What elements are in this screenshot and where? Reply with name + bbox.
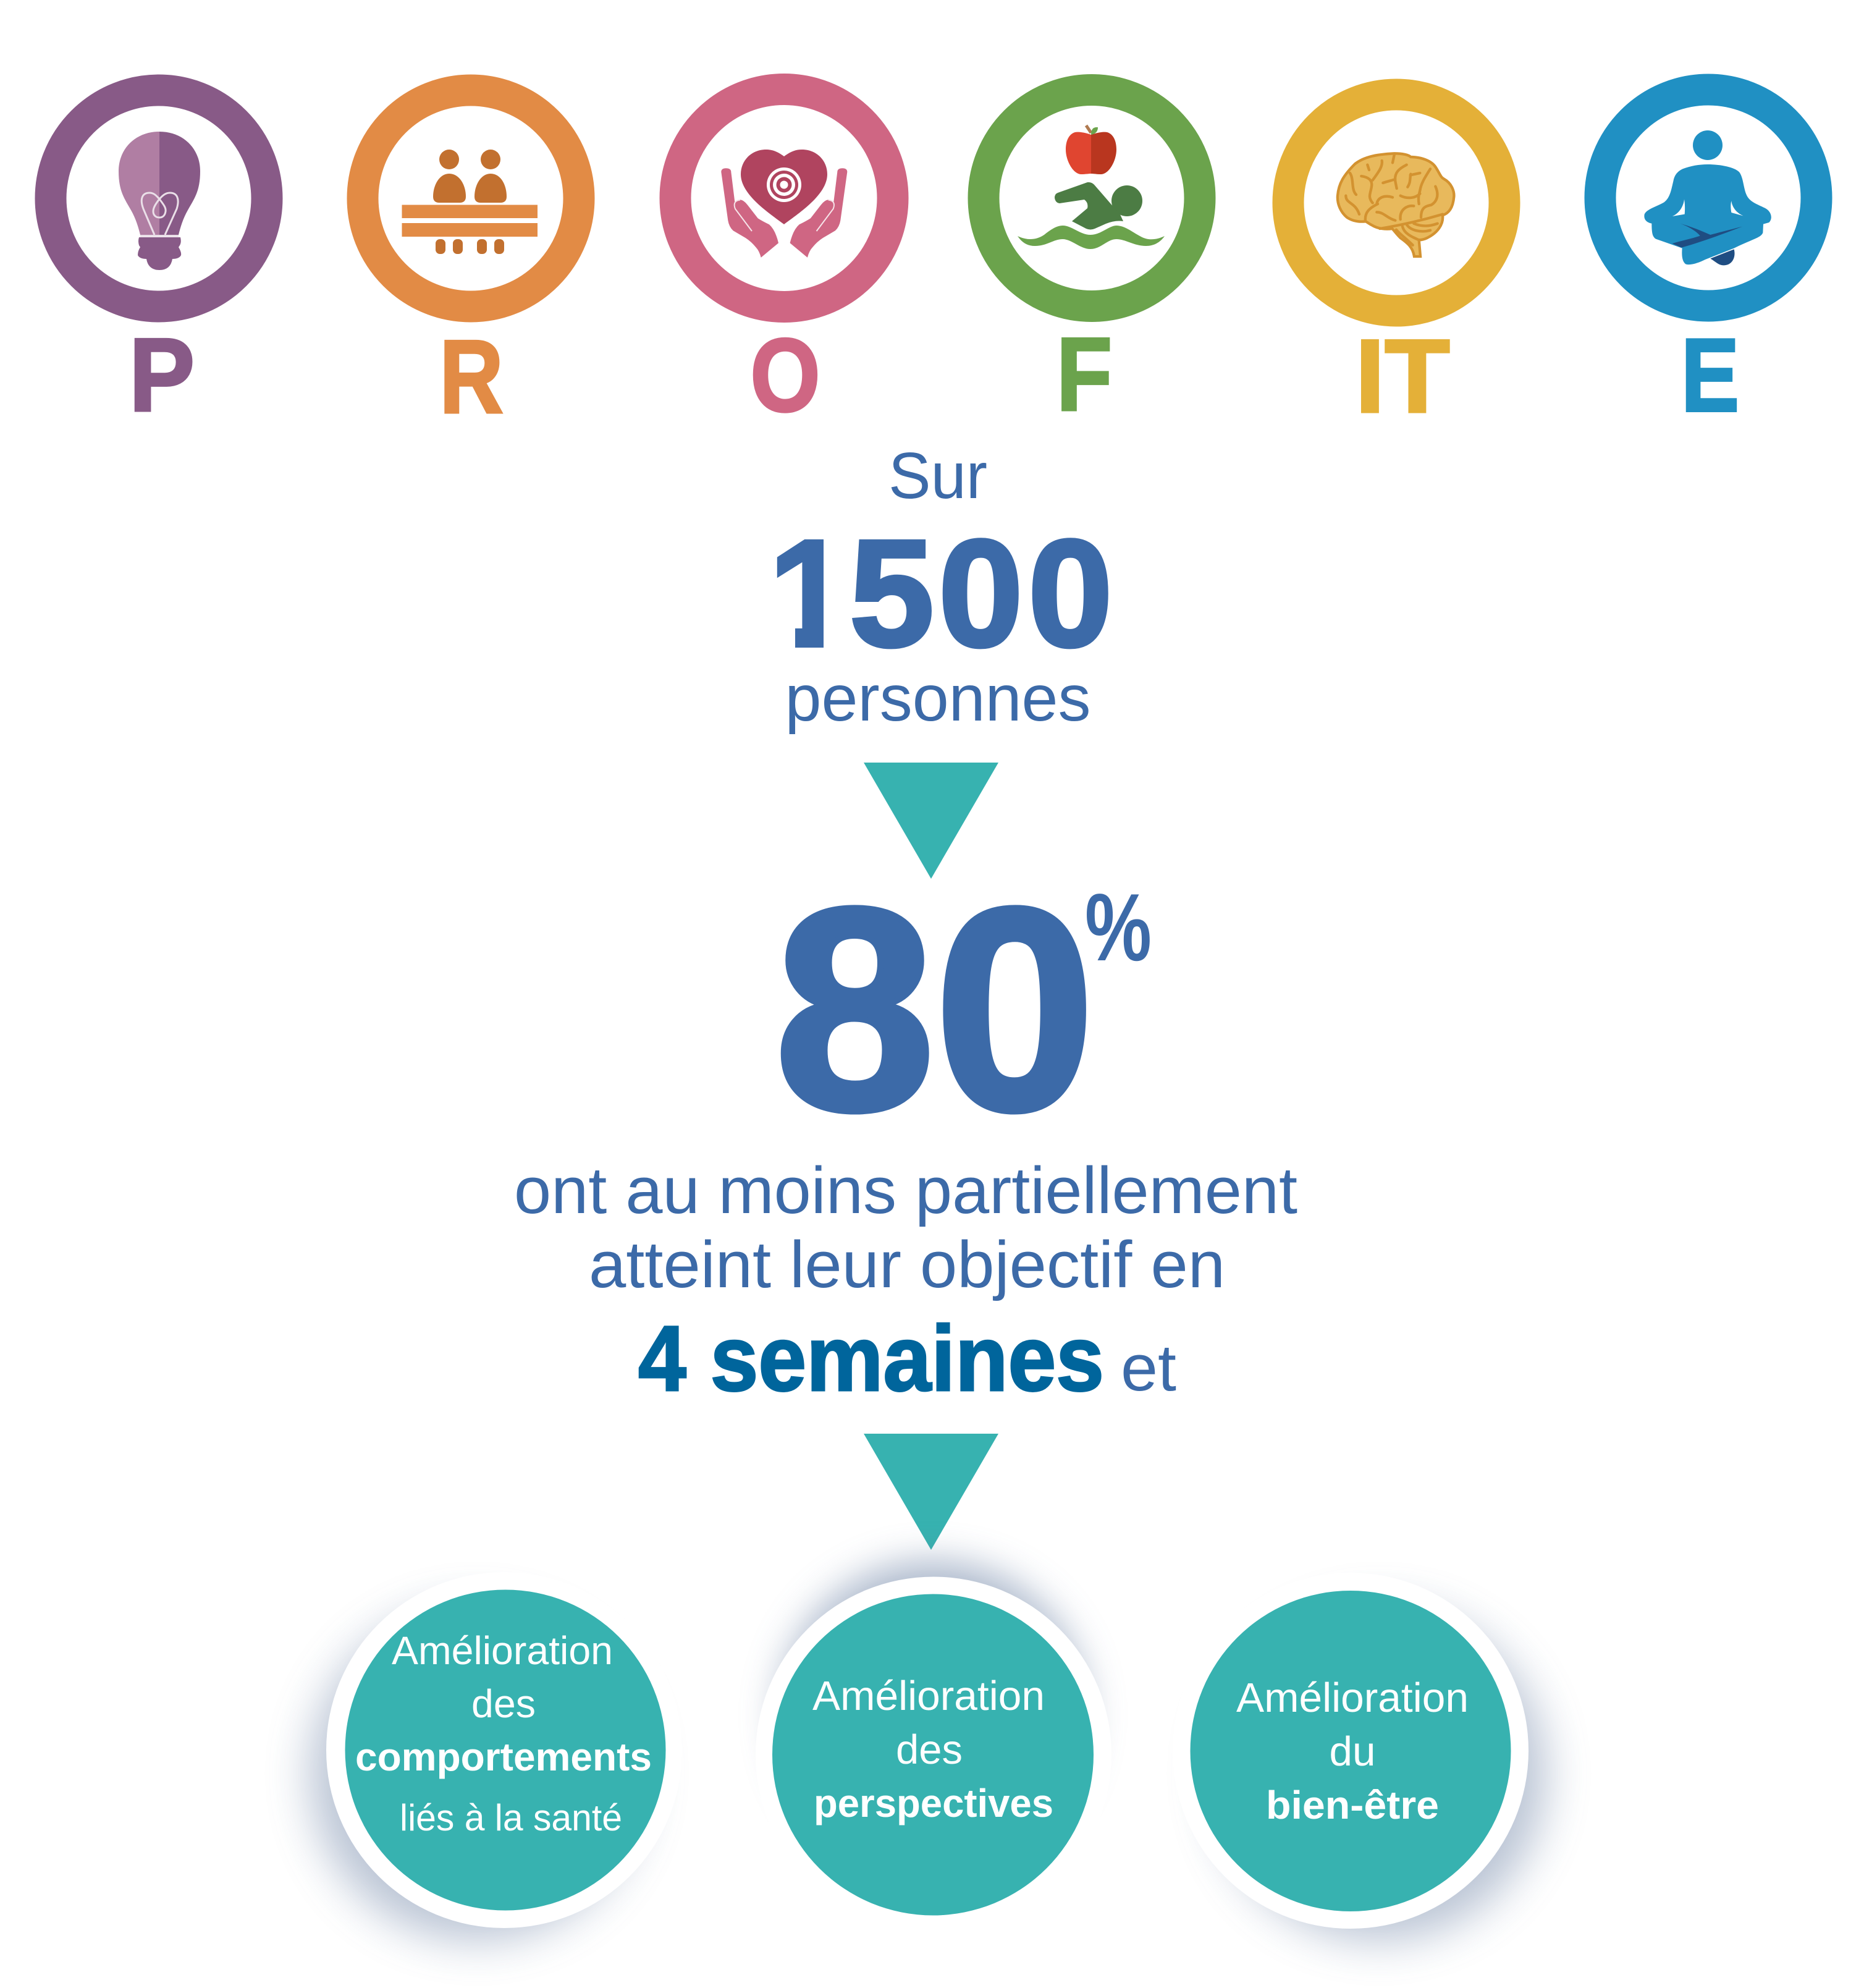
icon: E meditation badge <box>1600 90 1816 306</box>
letter E: E <box>1681 317 1739 433</box>
letter P: P <box>129 316 195 433</box>
icon: IT brain badge <box>1288 95 1504 311</box>
icon: R people at a table badge <box>363 90 579 307</box>
letter R: R <box>440 319 503 435</box>
text: objective statement: et <box>1121 1330 1176 1405</box>
arrow: triangle down to outcomes <box>864 1434 998 1550</box>
letter F: F <box>1056 316 1112 433</box>
icon: F apple and swimmer badge <box>984 90 1200 307</box>
icon: O heart in hands badge <box>675 89 893 307</box>
panel: PROFITE icon row <box>51 89 1816 435</box>
arrow: triangle down to 80% <box>864 763 998 879</box>
letter O: O <box>750 317 820 433</box>
text: objective statement: 4 semaines <box>638 1306 1104 1410</box>
text: personnes: personnes <box>785 662 1091 735</box>
panel: outcome circle perspectives <box>756 1561 1111 1933</box>
panel: outcome circle well-being: bien-être <box>1266 1783 1439 1827</box>
panel: outcome circle behaviours: liés à la santé <box>400 1797 622 1838</box>
number: 1500: 500 <box>850 509 1113 679</box>
panel: outcome circle behaviours: Amélioration <box>392 1628 613 1673</box>
panel: outcome circle well-being <box>1173 1573 1546 1940</box>
panel: outcome circle behaviours: comportements <box>355 1735 652 1779</box>
number: 80 percent: 80 <box>775 848 1095 1170</box>
number: 1500: 1 <box>769 509 853 679</box>
panel: outcome circle well-being: du <box>1330 1728 1375 1775</box>
panel: outcome circle perspectives: perspectives <box>814 1781 1053 1825</box>
panel: outcome circle behaviours <box>310 1572 682 1940</box>
number: 1500 <box>777 538 1108 649</box>
text: Sur: Sur <box>888 439 987 512</box>
text: objective statement <box>514 1153 1297 1410</box>
panel: outcome circle well-being: Amélioration <box>1236 1675 1469 1721</box>
text: objective statement: ont au moins partiellement <box>514 1153 1297 1227</box>
panel: outcome circle perspectives: Amélioration <box>812 1673 1045 1719</box>
icon: P lightbulb badge <box>51 90 267 307</box>
panel: outcome circle perspectives: des <box>896 1727 963 1773</box>
text: objective statement: atteint leur objectif en <box>589 1227 1225 1301</box>
panel: outcome circle behaviours: des <box>471 1681 536 1726</box>
number: 80 percent: % <box>1085 874 1152 981</box>
letters IT: IT <box>1356 318 1449 434</box>
